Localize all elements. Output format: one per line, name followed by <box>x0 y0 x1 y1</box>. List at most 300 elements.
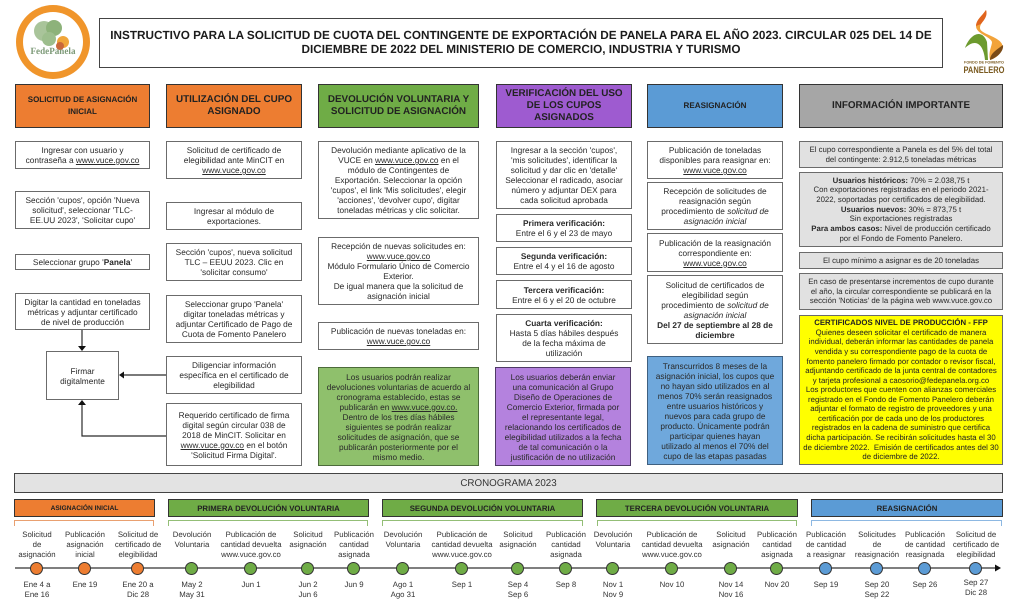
event: publicación devuelta 2: www.vuce.gov.co <box>432 550 492 559</box>
event: publicación asignación inicial <box>65 530 105 589</box>
info: cupo mínimo <box>799 252 1003 269</box>
phase: asignación inicial <box>14 499 155 517</box>
note: transcurridos 8 meses: producto. Únicamente podrán <box>660 420 770 430</box>
cuarta verificación: Cuarta verificación: <box>525 318 603 328</box>
panel: verificación del uso de los cupos <box>495 84 632 466</box>
event: solicitud asignación 3: Nov 16 <box>719 590 743 598</box>
info: certificados nivel de producción: CERTIFICADOS NIVEL DE PRODUCCIÓN - FFP <box>814 318 988 327</box>
phase: tercera devolución voluntaria <box>596 499 798 517</box>
event: solicitudes de reasignación: Solicitudes <box>858 530 896 539</box>
event: publicación reasignada: reasignada <box>906 550 944 559</box>
event: publicación asignada 1: Jun 9 <box>344 580 364 589</box>
step: solicitud de certificados: Del 27 de septiembre al 28 de <box>657 320 773 330</box>
info: certificados nivel de producción: Los productores que cuenten con alianzas comerciales <box>806 385 996 394</box>
segunda verificación: Entre el 4 y el 16 de agosto <box>513 261 614 271</box>
heading: INFORMACIÓN IMPORTANTE <box>832 100 970 111</box>
event: publicación asignada 3 <box>757 530 797 589</box>
step: seleccionar grupo: digitar toneladas métricas y <box>183 309 284 319</box>
event: publicación devuelta 1: Publicación de <box>226 530 276 539</box>
note: comunicación: Diseño de Operaciones de <box>514 392 612 402</box>
note: transcurridos 8 meses: entre usuarios históricos y <box>667 400 763 410</box>
arrows to firmar digitalmente <box>78 330 166 437</box>
heading <box>647 84 783 128</box>
step: digitar cantidad: Digitar la cantidad en toneladas <box>24 296 141 306</box>
event: devolución voluntaria 3: Nov 9 <box>603 590 623 598</box>
step: ingresar: contraseña a www.vuce.gov.co <box>26 155 139 165</box>
event: publicación reasignada: de cantidad <box>905 540 945 549</box>
event: solicitud de asignación: Ene 16 <box>25 590 49 598</box>
step: solicitud de certificados <box>647 275 783 344</box>
step: recepción de nuevas solicitudes: Módulo Formulario Único de Comercio <box>327 261 470 271</box>
event: solicitud asignación 3: Solicitud <box>716 530 746 539</box>
step: ingresar a cupos: solicitud y dar clic en 'detalle' <box>511 165 617 175</box>
info: incrementos: En caso de presentarse incrementos de cupo durante <box>808 277 994 286</box>
step: sección cupos: 'solicitar consumo' <box>200 267 268 277</box>
info: usuarios: Usuarios nuevos: 30% = 873,75 t <box>841 205 961 214</box>
phase: tercera devolución voluntaria: TERCERA DEVOLUCIÓN VOLUNTARIA <box>625 504 769 512</box>
event: certificado de elegibilidad reasignación: certificado de <box>953 540 999 549</box>
heading: SOLICITUD DE ASIGNACIÓN <box>331 106 466 117</box>
event: publicación devuelta 2: Publicación de <box>437 530 487 539</box>
info: usuarios: Usuarios históricos: 70% = 2.038,75 t <box>833 176 969 185</box>
step: devolución mediante VUCE: Devolución mediante aplicativo de la <box>331 145 466 155</box>
event: solicitud asignación 1: asignación <box>289 540 327 549</box>
step: ingresar <box>15 141 150 169</box>
info: cupo panela: del contingente: 2.912,5 toneladas métricas <box>826 154 976 164</box>
event: publicación asignada 1: asignada <box>338 550 370 559</box>
info: incrementos <box>799 273 1003 310</box>
info: certificados nivel de producción: adjuntar el formato de registro de proveedores y una <box>810 404 992 413</box>
timeline axis <box>15 564 1001 572</box>
step: publicación de la reasignación: Publicación de la reasignación <box>659 238 771 248</box>
step: certificado de firma digital: www.vuce.gov.co en el botón <box>181 440 287 450</box>
phase: asignación inicial: ASIGNACIÓN INICIAL <box>51 504 118 512</box>
step: devolución mediante VUCE: toneladas métricas y clic solicitar. <box>337 205 460 215</box>
step: seleccionar grupo: Cuota de Fomento Panelero <box>182 329 286 339</box>
step: recepción de solicitudes: Recepción de solicitudes de <box>663 186 767 196</box>
tercera verificación <box>496 280 632 309</box>
phase: primera devolución voluntaria <box>168 499 369 517</box>
event: certificado de elegibilidad: Solicitud de <box>118 530 158 539</box>
note: devoluciones: Los usuarios podrán realizar <box>346 372 451 382</box>
step: publicación de nuevas toneladas: www.vuce.gov.co <box>367 336 430 346</box>
step: ingresar a cupos: Ingresar a la sección 'cupos', <box>511 145 617 155</box>
step: seleccionar grupo: Seleccionar grupo 'Panela' <box>185 299 283 309</box>
info: certificados nivel de producción: registrados en la cadena de suministro que certifica <box>812 423 990 432</box>
event: solicitudes de reasignación: Sep 22 <box>865 590 889 598</box>
event: publicación a reasignar <box>806 530 846 589</box>
event: publicación asignada 3: asignada <box>761 550 793 559</box>
note: transcurridos 8 meses: menos 70% serán reasignados <box>658 390 772 400</box>
step: sección cupos: Sección 'cupos', nueva solicitud <box>176 247 292 257</box>
step: certificado de firma digital: 'Solicitud Firma Digital'. <box>191 450 277 460</box>
step: certificado de firma digital <box>166 403 302 466</box>
step: certificado de firma digital: digital según circular 038 de <box>182 420 286 430</box>
phase: segunda devolución voluntaria <box>382 499 583 517</box>
note: comunicación: una comunicación al Grupo <box>512 382 614 392</box>
event: solicitud de asignación: de <box>33 540 41 549</box>
info: certificados nivel de producción: dicha participación. Se recibirán solicitudes hasta el 30 <box>806 433 996 442</box>
event: devolución voluntaria 2: Voluntaria <box>386 540 420 549</box>
note: comunicación: de tal comunicación o la <box>518 442 608 452</box>
info: usuarios: 2022, soportadas por certificados de elegibilidad. <box>816 195 986 204</box>
event: solicitud asignación 2: Sep 4 <box>508 580 528 589</box>
event: publicación asignación inicial: Ene 19 <box>73 580 97 589</box>
event: publicación devuelta 3: Publicación de <box>647 530 697 539</box>
title: DICIEMBRE DE 2022 DEL MINISTERIO DE COMERCIO, INDUSTRIA Y TURISMO <box>302 43 740 56</box>
info: certificados nivel de producción: y tarjeta profesional a caosorio@fedepanela.org.co <box>813 376 989 385</box>
event: publicación devuelta 2: cantidad devuelta <box>431 540 493 549</box>
panel: reasignación <box>647 84 783 465</box>
event: devolución voluntaria 2 <box>384 530 422 599</box>
title: INSTRUCTIVO PARA LA SOLICITUD DE CUOTA DEL CONTINGENTE DE EXPORTACIÓN DE PANELA PARA EL AÑO 2023. CIRCULAR 025 DEL 14 DE <box>110 28 932 42</box>
note: transcurridos 8 meses: utilizado al menos el 70% del <box>661 440 769 450</box>
event: publicación devuelta 2: Sep 1 <box>452 580 472 589</box>
event: devolución voluntaria 2: Ago 31 <box>391 590 415 598</box>
note: transcurridos 8 meses: no hayan sido utilizados en al <box>661 380 769 390</box>
note: devoluciones: publicarán posteriormente por el <box>339 442 458 452</box>
event: publicación devuelta 3: Nov 10 <box>660 580 684 589</box>
event: publicación a reasignar: Sep 19 <box>814 580 838 589</box>
step: recepción de solicitudes <box>647 182 783 230</box>
phase: reasignación <box>811 499 1003 517</box>
step: devolución mediante VUCE: Exportación. Seleccionar la opción <box>335 175 462 185</box>
info: certificados nivel de producción: registrado en el Fondo de Fomento Panelero deberán <box>808 395 994 404</box>
step: ingresar a cupos: número y adjuntar DEX para <box>511 185 617 195</box>
event: devolución voluntaria 3: Nov 1 <box>603 580 623 589</box>
event: solicitud asignación 2: asignación <box>499 540 537 549</box>
note: transcurridos 8 meses <box>647 356 783 465</box>
step: solicitud de certificados: elegibilidad según <box>682 290 748 300</box>
step: certificado de firma digital: Requerido certificado de firma <box>179 410 289 420</box>
panel: información importante <box>799 84 1003 465</box>
info: certificados nivel de producción: Quienes deseen solicitar el certificado de manera <box>816 328 986 337</box>
event: devolución voluntaria 1: Voluntaria <box>175 540 209 549</box>
info: usuarios: por el Fondo de Fomento Panelero. <box>839 234 963 243</box>
logo: Fondo de Fomento Panelero: FONDO DE FOMENTO <box>964 60 1004 64</box>
step: publicación de toneladas <box>647 141 783 179</box>
heading: cronograma 2023 <box>14 473 1003 493</box>
step: certificado de firma digital: 2018 de MinCIT. Solicitar en <box>182 430 286 440</box>
step: diligenciar información: Diligenciar información <box>192 360 276 370</box>
step: digitar cantidad: métricas y adjuntar certificado <box>27 306 138 316</box>
phase: reasignación: REASIGNACIÓN <box>877 504 937 512</box>
event: certificado de elegibilidad <box>115 530 161 598</box>
event: publicación asignación inicial: Publicación <box>65 530 105 539</box>
step: recepción de nuevas solicitudes: Recepción de nuevas solicitudes en: <box>331 241 466 251</box>
heading: DEVOLUCIÓN VOLUNTARIA Y <box>328 94 469 105</box>
info: usuarios: Para ambos casos: Nivel de producción certificado <box>811 224 991 233</box>
event: solicitudes de reasignación <box>855 530 899 599</box>
event: publicación a reasignar: a reasignar <box>806 550 846 559</box>
event: devolución voluntaria 3: Voluntaria <box>596 540 630 549</box>
event: publicación asignación inicial: asignación <box>66 540 104 549</box>
step: módulo de exportaciones <box>166 202 302 230</box>
note: comunicación: justificación de no utilización <box>511 452 615 462</box>
note: transcurridos 8 meses: participar quienes hayan <box>670 430 760 440</box>
event: certificado de elegibilidad: elegibilidad <box>118 550 158 559</box>
tercera verificación: Tercera verificación: <box>524 284 604 294</box>
event: devolución voluntaria 1 <box>173 530 211 599</box>
event: devolución voluntaria 2: Ago 1 <box>393 580 413 589</box>
step: recepción de solicitudes: asignación inicial <box>684 216 746 226</box>
event: certificado de elegibilidad reasignación: elegibilidad <box>956 550 996 559</box>
event: publicación reasignada: Sep 26 <box>913 580 937 589</box>
note: transcurridos 8 meses: asignación inicial, los cupos que <box>656 370 774 380</box>
panel: utilización del cupo asignado <box>166 84 302 466</box>
event: certificado de elegibilidad reasignación <box>953 530 999 596</box>
phase: primera devolución voluntaria: PRIMERA DEVOLUCIÓN VOLUNTARIA <box>197 504 340 512</box>
step: solicitud de certificados: Solicitud de certificados de <box>666 280 764 290</box>
note: devoluciones: publicarán en www.vuce.gov.co. <box>340 402 457 412</box>
note: comunicación: Los usuarios deberán enviar <box>511 372 615 382</box>
step: recepción de nuevas solicitudes: asignación inicial <box>367 291 430 301</box>
step: seleccionar grupo <box>166 295 302 343</box>
step: firmar digitalmente <box>46 351 119 400</box>
info: incrementos: el año, la circular correspondiente se publicará en la <box>811 287 991 296</box>
cuarta verificación: Hasta 5 días hábiles después <box>510 328 618 338</box>
step: publicación de nuevas toneladas: Publicación de nuevas toneladas en: <box>331 326 466 336</box>
event: devolución voluntaria 1: Devolución <box>173 530 211 539</box>
event: solicitud de asignación <box>18 530 56 598</box>
note: comunicación <box>495 367 631 466</box>
info: usuarios: Sin exportaciones registradas <box>850 214 952 223</box>
note: devoluciones: siguientes se podrán realizar <box>345 422 452 432</box>
step: devolución mediante VUCE: módulo de Contingentes de <box>348 165 449 175</box>
event: devolución voluntaria 2: Devolución <box>384 530 422 539</box>
step: devolución mediante VUCE: 'acciones', 'devolver cupo', digitar <box>337 195 460 205</box>
info: cupo mínimo: El cupo mínimo a asignar es de 20 toneladas <box>823 256 979 265</box>
cuarta verificación <box>496 314 632 362</box>
event: publicación devuelta 1: Jun 1 <box>241 580 261 589</box>
step: ingresar a cupos <box>496 141 632 209</box>
step: seleccionar grupo <box>15 254 150 270</box>
event: solicitud asignación 3: Nov 14 <box>719 580 743 589</box>
event: certificado de elegibilidad reasignación: Sep 27 <box>964 578 988 587</box>
panel: devolución voluntaria <box>318 84 479 466</box>
event: solicitud asignación 2 <box>499 530 537 599</box>
step: módulo de exportaciones: exportaciones. <box>207 216 261 226</box>
event: publicación devuelta 3 <box>641 530 703 589</box>
step: solicitud de certificados: diciembre <box>695 330 735 340</box>
event: publicación reasignada: Publicación <box>905 530 945 539</box>
info: cupo panela: El cupo correspondiente a Panela es del 5% del total <box>810 145 992 154</box>
step: solicitud de certificados: asignación inicial <box>684 310 746 320</box>
step: publicación de la reasignación <box>647 233 783 272</box>
tercera verificación: Entre el 6 y el 20 de octubre <box>512 294 616 304</box>
event: solicitud de asignación: asignación <box>18 550 56 559</box>
event: publicación asignada 1 <box>334 530 374 589</box>
note: comunicación: el representante legal, <box>522 412 604 422</box>
event: certificado de elegibilidad: certificado de <box>115 540 161 549</box>
heading: SOLICITUD DE ASIGNACIÓN <box>28 95 137 104</box>
info: certificados nivel de producción: de diciembre de 2022. <box>862 452 940 461</box>
info: usuarios: Con exportaciones registradas en el periodo 2021- <box>813 185 989 194</box>
step: publicación de la reasignación: correspondiente en: <box>678 248 752 258</box>
event: publicación asignación inicial: inicial <box>75 550 95 559</box>
heading: DE LOS CUPOS <box>527 100 601 111</box>
event: solicitud asignación 1: Jun 2 <box>298 580 318 589</box>
heading: INICIAL <box>68 107 97 116</box>
note: devoluciones: cronograma establecido, estas se <box>336 392 461 402</box>
heading: VERIFICACIÓN DEL USO <box>505 88 623 99</box>
step: ingresar a cupos: Seleccionar el radicado, asociar <box>505 175 623 185</box>
heading <box>15 84 150 128</box>
info: certificados nivel de producción <box>799 315 1003 465</box>
note: transcurridos 8 meses: cupo de las etapas pasadas <box>663 450 767 460</box>
event: publicación asignada 2: Publicación <box>546 530 586 539</box>
event: certificado de elegibilidad reasignación: Dic 28 <box>965 588 987 596</box>
event: devolución voluntaria 3 <box>594 530 632 598</box>
panel: solicitud de asignación inicial <box>15 84 150 400</box>
step: ingresar a cupos: cada solicitud aprobada <box>520 195 608 205</box>
event: solicitud asignación 3 <box>712 530 750 598</box>
heading: cronograma 2023: CRONOGRAMA 2023 <box>460 478 557 488</box>
event: publicación asignada 2 <box>546 530 586 589</box>
event: publicación asignada 1: cantidad <box>339 540 369 549</box>
note: comunicación: relacionando los certificados de <box>505 422 621 432</box>
step: solicitud de certificados: procedimiento de solicitud de <box>661 300 769 310</box>
event: solicitud asignación 1: Jun 6 <box>298 590 318 598</box>
primera verificación: Entre el 6 y el 23 de mayo <box>516 228 612 238</box>
step: firmar digitalmente: Firmar <box>71 366 94 376</box>
step: seleccionar grupo: Seleccionar grupo 'Panela' <box>33 257 132 267</box>
step: sección cupos: TLC – EEUU 2023. Clic en <box>185 257 283 267</box>
note: comunicación: elegibilidad utilizados a la fecha <box>505 432 621 442</box>
step: devolución mediante VUCE: 'cupos', el link 'Mis solicitudes', elegir <box>331 185 466 195</box>
info: usuarios <box>799 172 1003 247</box>
heading <box>496 84 632 128</box>
event: solicitud asignación 3: asignación <box>712 540 750 549</box>
event: publicación devuelta 2 <box>431 530 493 589</box>
event: publicación devuelta 1 <box>220 530 282 589</box>
heading: UTILIZACIÓN DEL CUPO <box>176 94 292 105</box>
step: diligenciar información: elegibilidad <box>213 380 255 390</box>
primera verificación: Primera verificación: <box>523 218 605 228</box>
step: módulo de exportaciones: Ingresar al módulo de <box>194 206 274 216</box>
heading: ASIGNADO <box>207 106 261 117</box>
step: recepción de nuevas solicitudes: www.vuce.gov.co <box>367 251 430 261</box>
cuarta verificación: utilización <box>546 348 582 358</box>
step: certificado de elegibilidad <box>166 141 302 179</box>
info: certificados nivel de producción: individual, deberán informar las cantidades de panela <box>809 337 993 346</box>
note: devoluciones: mismo medio. <box>373 452 424 462</box>
step: sección cupos <box>15 191 150 229</box>
step: certificado de elegibilidad: elegibilidad ante MinCIT en <box>184 155 284 165</box>
note: devoluciones: solicitudes de asignación, que se <box>338 432 459 442</box>
step: sección cupos: EE.UU 2023', 'Solicitar cupo' <box>30 215 135 225</box>
event: publicación asignada 3: Nov 20 <box>765 580 789 589</box>
logo: Fondo de Fomento Panelero <box>964 10 1004 76</box>
event: certificado de elegibilidad reasignación: Solicitud de <box>956 530 996 539</box>
step: devolución mediante VUCE: VUCE en www.vuce.gov.co en el <box>338 155 459 165</box>
note: transcurridos 8 meses: Transcurridos 8 meses de la <box>663 360 767 370</box>
step: ingresar: Ingresar con usuario y <box>41 145 124 155</box>
event: certificado de elegibilidad: Ene 20 a <box>122 580 154 589</box>
segunda verificación <box>496 247 632 275</box>
note: transcurridos 8 meses: nuevos para cada grupo de <box>664 410 766 420</box>
step: certificado de elegibilidad: www.vuce.gov.co <box>202 165 266 175</box>
title <box>99 18 943 68</box>
info: incrementos: sección 'Noticias' de la página web www.vuce.gov.co <box>810 296 992 305</box>
note: comunicación: Comercio Exterior, firmada por <box>507 402 619 412</box>
event: publicación a reasignar: de cantidad <box>806 540 846 549</box>
note: devoluciones: Dentro de los tres días hábiles <box>342 412 455 422</box>
event: publicación asignada 2: Sep 8 <box>556 580 576 589</box>
info: certificados nivel de producción: fomento panelero firmado por contador o revisor fiscal, <box>807 357 995 366</box>
event: devolución voluntaria 1: May 2 <box>181 580 203 589</box>
event: devolución voluntaria 1: May 31 <box>179 590 205 598</box>
event: publicación a reasignar: Publicación <box>806 530 846 539</box>
event: publicación asignada 2: asignada <box>550 550 582 559</box>
note: devoluciones <box>318 367 479 466</box>
event: solicitudes de reasignación: reasignación <box>855 550 899 559</box>
event: solicitud asignación 1: Solicitud <box>293 530 323 539</box>
step: sección cupos: Sección 'cupos', opción 'Nueva <box>25 195 140 205</box>
step: publicación de toneladas: Publicación de toneladas <box>669 145 761 155</box>
event: publicación devuelta 1: cantidad devuelta <box>220 540 282 549</box>
event: publicación devuelta 1: www.vuce.gov.co <box>221 550 281 559</box>
logo: FedePanela <box>16 5 90 79</box>
step: sección cupos <box>166 243 302 281</box>
step: digitar cantidad <box>15 293 150 330</box>
step: publicación de nuevas toneladas <box>318 322 479 350</box>
info: certificados nivel de producción: vendida y su correspondiente pago de la cuota de <box>815 347 987 356</box>
event: solicitud asignación 2: Sep 6 <box>508 590 528 598</box>
event: publicación asignada 2: cantidad <box>551 540 581 549</box>
event: solicitud asignación 2: Solicitud <box>503 530 533 539</box>
heading <box>166 84 302 128</box>
heading <box>318 84 479 128</box>
info: certificados nivel de producción: adjuntando certificado de la junta central de contadores <box>805 366 997 375</box>
heading: ASIGNADOS <box>534 112 594 123</box>
step: sección cupos: solicitud', seleccionar 'TLC- <box>32 205 133 215</box>
step: recepción de solicitudes: procedimiento de solicitud de <box>661 206 769 216</box>
step: recepción de nuevas solicitudes <box>318 237 479 305</box>
event: publicación reasignada <box>905 530 945 589</box>
cuarta verificación: de la fecha máxima de <box>522 338 606 348</box>
event: solicitud de asignación: Solicitud <box>22 530 52 539</box>
step: certificado de elegibilidad: Solicitud de certificado de <box>187 145 281 155</box>
event: publicación asignada 1: Publicación <box>334 530 374 539</box>
step: firmar digitalmente: digitalmente <box>60 376 105 386</box>
step: publicación de la reasignación: www.vuce.gov.co <box>683 258 747 268</box>
info: certificados nivel de producción: de diciembre 2022. Emisión de certificados antes del 30 <box>803 442 999 452</box>
phase: segunda devolución voluntaria: SEGUNDA DEVOLUCIÓN VOLUNTARIA <box>410 504 555 512</box>
heading <box>799 84 1003 128</box>
note: devoluciones: devoluciones voluntarias de acuerdo al <box>327 382 470 392</box>
heading: REASIGNACIÓN <box>684 101 746 110</box>
event: publicación asignada 3: Publicación <box>757 530 797 539</box>
event: publicación devuelta 3: cantidad devuelta <box>641 540 703 549</box>
segunda verificación: Segunda verificación: <box>521 251 607 261</box>
event: solicitud de asignación: Ene 4 a <box>24 580 50 589</box>
info: cupo panela <box>799 141 1003 168</box>
event: solicitudes de reasignación: Sep 20 <box>865 580 889 589</box>
step: recepción de solicitudes: reasignación según <box>679 196 751 206</box>
event: devolución voluntaria 3: Devolución <box>594 530 632 539</box>
step: recepción de nuevas solicitudes: De igual manera que la solicitud de <box>334 281 463 291</box>
event: publicación asignada 3: cantidad <box>762 540 792 549</box>
step: diligenciar información <box>166 356 302 394</box>
step: diligenciar información: específica en el certificado de <box>179 370 289 380</box>
step: publicación de toneladas: disponibles para reasignar en: <box>659 155 771 165</box>
logo: FedePanela: FedePanela <box>30 47 76 57</box>
event: certificado de elegibilidad: Dic 28 <box>127 590 149 598</box>
info: certificados nivel de producción: certificación por de cada uno de los productores <box>818 414 984 423</box>
step: publicación de toneladas: www.vuce.gov.co <box>683 165 747 175</box>
primera verificación <box>496 214 632 242</box>
